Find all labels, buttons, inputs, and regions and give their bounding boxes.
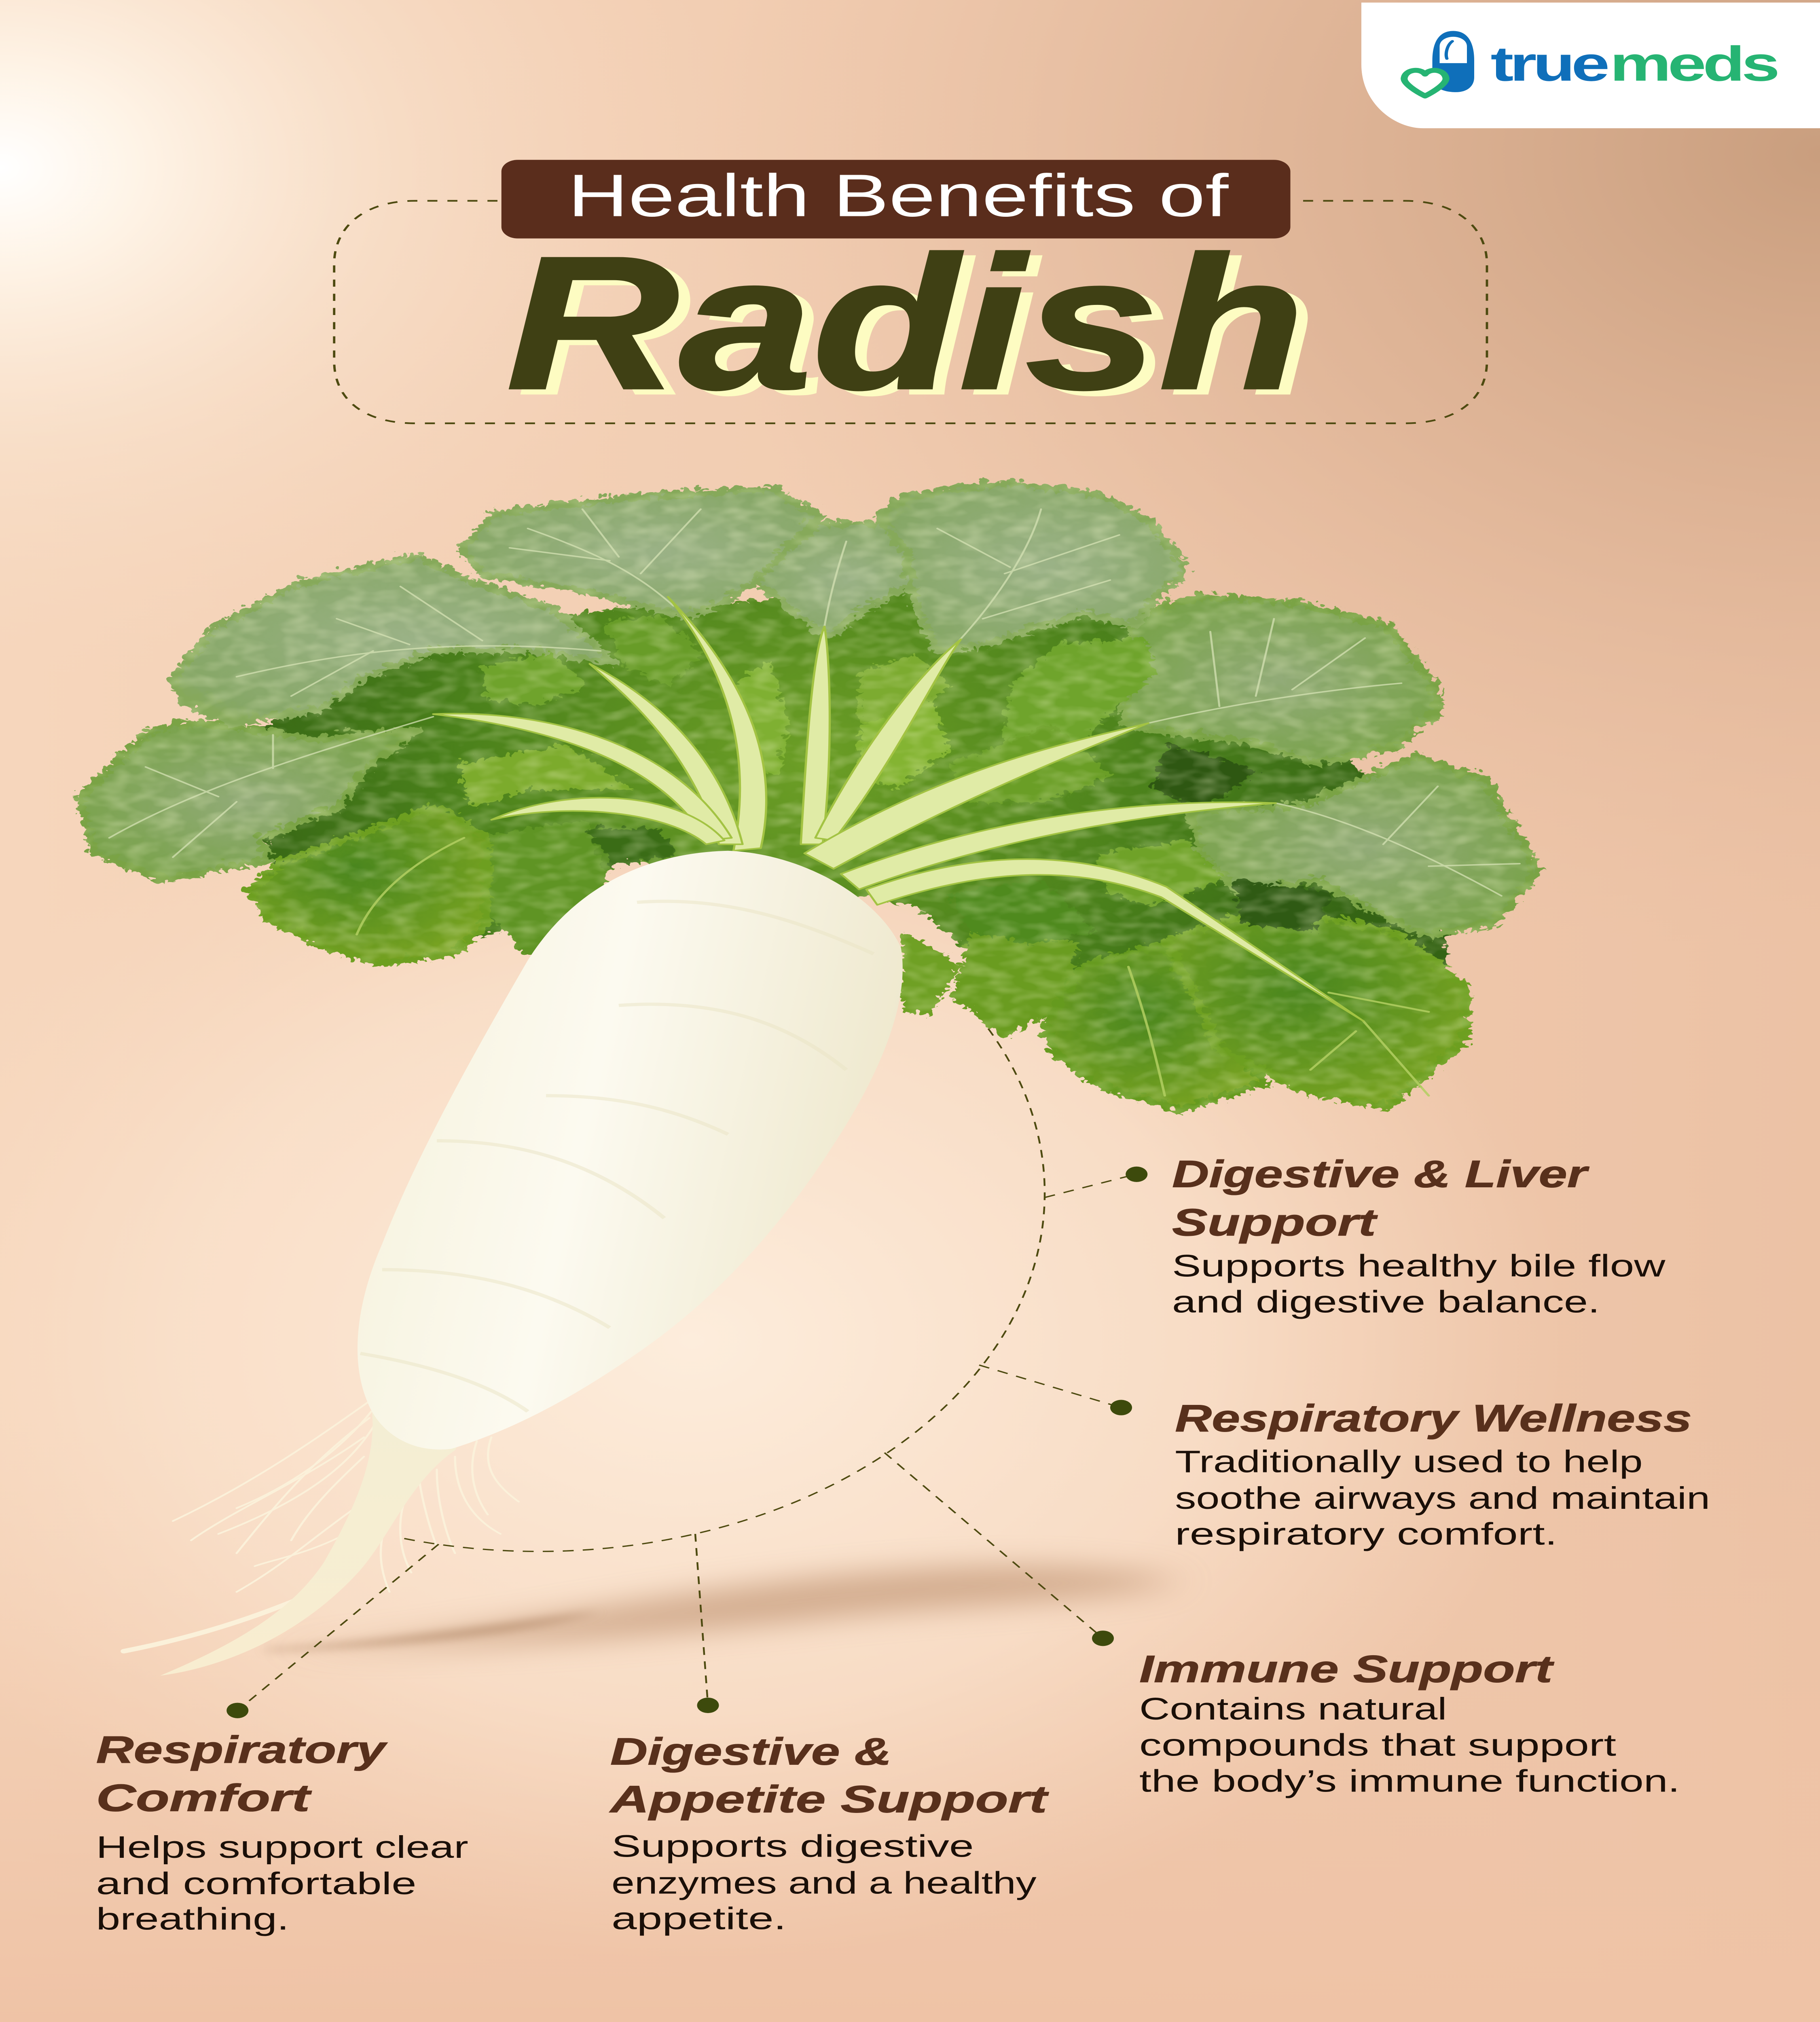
title block xyxy=(334,160,1487,434)
heading shadow: Radish: Radish xyxy=(518,222,1316,434)
callout: Digestive & Appetite Support: appetite. xyxy=(612,1901,786,1936)
title pill xyxy=(502,160,1290,239)
callout: Respiratory Comfort: Comfort xyxy=(96,1776,312,1819)
dashed title frame xyxy=(334,201,1487,423)
callout: Digestive & Liver Support: Support xyxy=(1172,1201,1378,1244)
callout: Immune Support: Contains natural xyxy=(1139,1692,1447,1726)
callout: Digestive & Liver Support xyxy=(1126,1153,1666,1320)
callout: Immune Support: compounds that support xyxy=(1139,1728,1616,1762)
heading: Health Benefits of: Health Benefits of xyxy=(568,162,1229,229)
callout: Respiratory Comfort: breathing. xyxy=(96,1901,289,1937)
leaf veins xyxy=(109,509,1520,1096)
callout: Digestive & Appetite Support: Appetite Support xyxy=(609,1778,1049,1821)
callout: Respiratory Comfort: Helps support clear xyxy=(96,1830,468,1865)
callout: Respiratory Wellness: Traditionally used to help xyxy=(1175,1444,1643,1479)
callout: Respiratory Comfort: and comfortable xyxy=(96,1866,417,1901)
callout connectors xyxy=(237,1029,1136,1711)
callout: Digestive & Appetite Support xyxy=(609,1698,1049,1936)
callout: Digestive & Appetite Support: enzymes and a healthy xyxy=(612,1865,1037,1900)
callout: Respiratory Wellness: respiratory comfort. xyxy=(1175,1516,1557,1552)
callout: Digestive & Liver Support: and digestive balance. xyxy=(1172,1284,1600,1320)
callout: Respiratory Wellness: Respiratory Wellness xyxy=(1175,1396,1692,1440)
callout: Digestive & Appetite Support: Digestive & xyxy=(610,1730,892,1773)
callout: Respiratory Wellness: soothe airways and maintain xyxy=(1175,1481,1710,1516)
callout: Digestive & Liver Support: Supports healthy bile flow xyxy=(1172,1248,1666,1284)
callout: Digestive & Appetite Support: Supports digestive xyxy=(612,1829,974,1864)
logo: truemeds: true xyxy=(1491,37,1610,91)
stems xyxy=(433,597,1363,1021)
callout: Respiratory Wellness xyxy=(1110,1396,1710,1552)
callout: Immune Support: the body’s immune function. xyxy=(1139,1764,1680,1799)
callout: Immune Support: Immune Support xyxy=(1139,1648,1554,1690)
radish root tail xyxy=(160,1405,459,1676)
callout: Immune Support xyxy=(1092,1631,1680,1799)
radish body xyxy=(358,851,903,1449)
callout: Digestive & Liver Support: Digestive & Liver xyxy=(1172,1153,1589,1195)
dashed arc around radish xyxy=(400,1029,1045,1551)
leaves xyxy=(74,480,1534,1107)
callout: Respiratory Comfort: Respiratory xyxy=(96,1728,388,1771)
root hairs xyxy=(124,1398,518,1651)
radish skin ribs xyxy=(360,901,874,1411)
radish illustration xyxy=(74,480,1534,1676)
callout: Respiratory Comfort xyxy=(96,1703,468,1937)
logo: truemeds xyxy=(1361,2,1820,128)
radish shadow on surface xyxy=(266,1566,1183,1651)
logo: truemeds: meds xyxy=(1610,37,1780,91)
heading: Radish: Radish xyxy=(506,217,1305,429)
